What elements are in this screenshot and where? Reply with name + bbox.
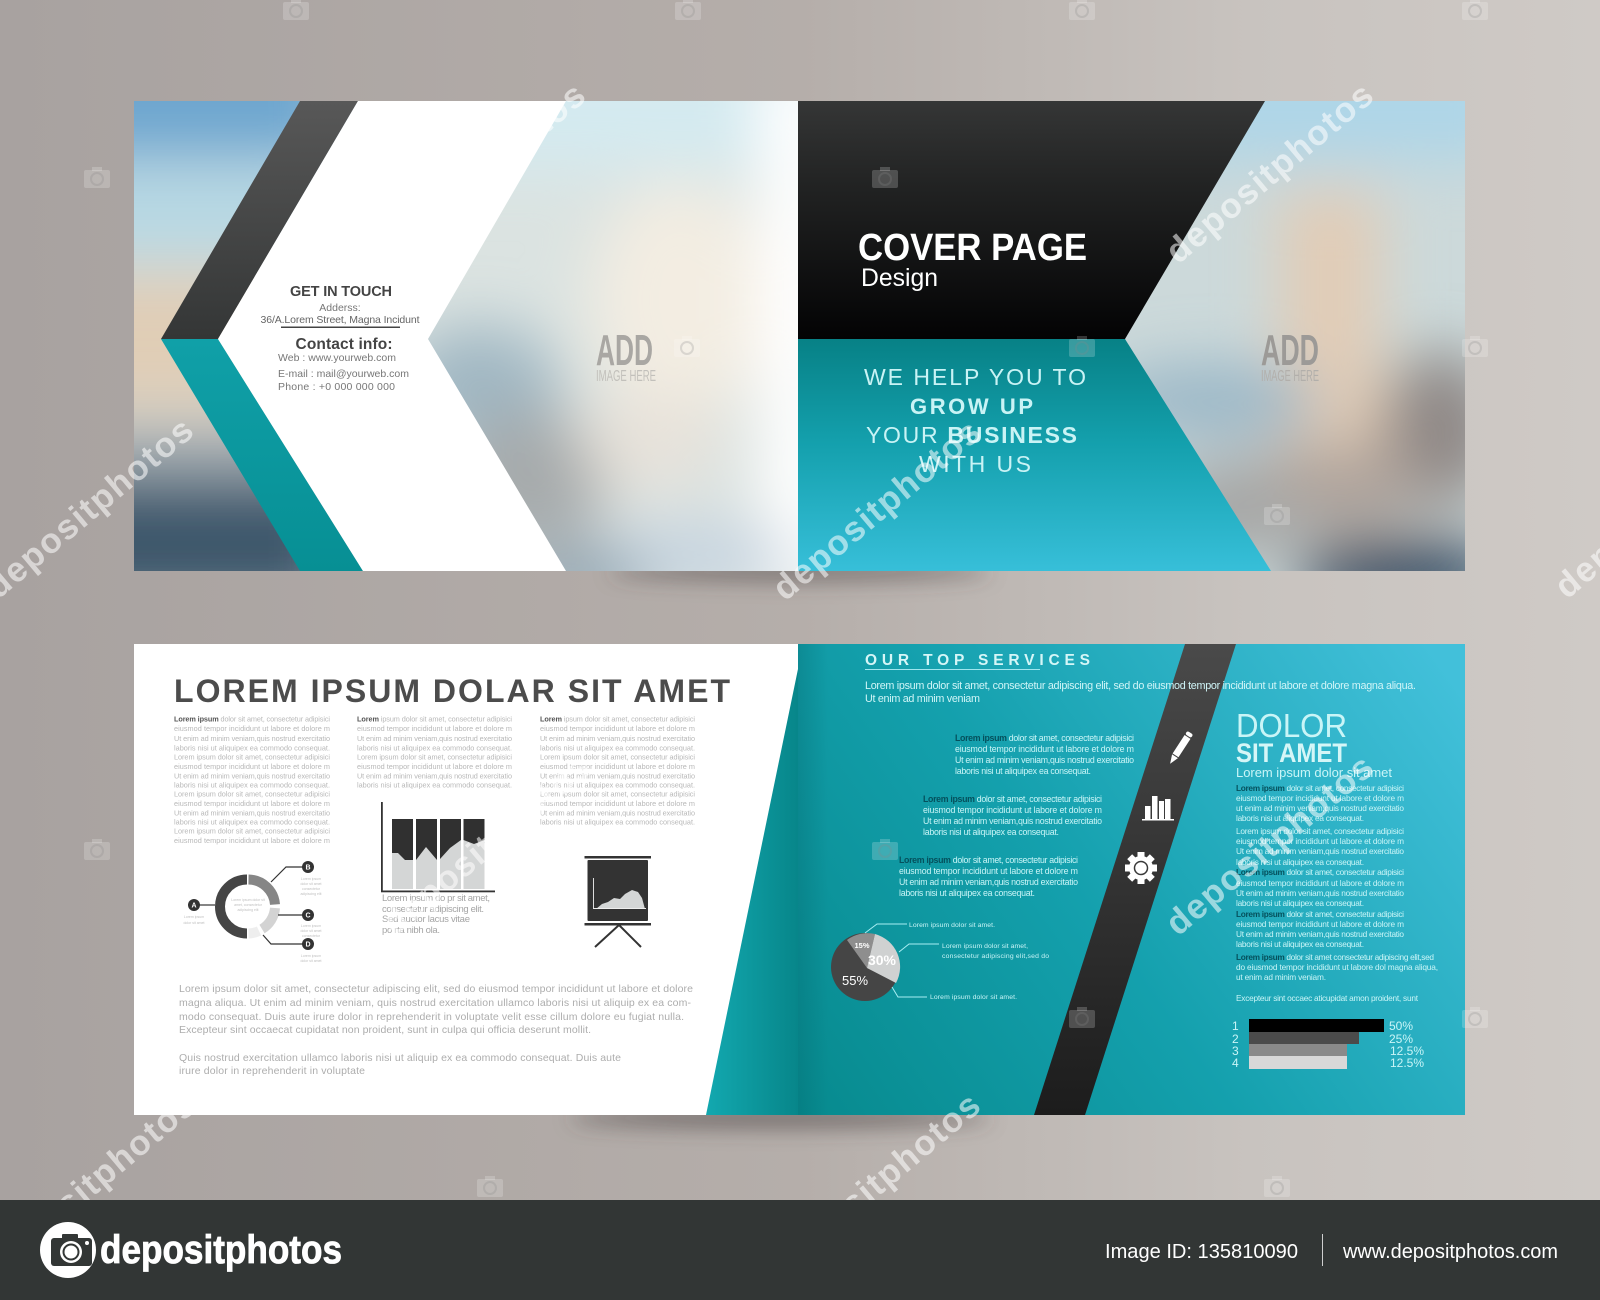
service text 2: Lorem ipsum dolor sit amet, consectetur adipisici [923,794,1102,804]
placeholder: add image [596,326,656,385]
body paragraph: magna aliqua. Ut enim ad minim veniam, quis nostrud exercitation ullamco laboris nisi ut aliquip ex ea com- [179,997,692,1009]
horizontal bar chart: 12.5% [1390,1044,1424,1058]
text column 1: Lorem ipsum dolor sit amet, consectetur adipisici [174,714,330,724]
diagonal dark strip [1034,644,1236,1115]
watermark: diagonal text and camera marks: depositphotos [370,75,593,271]
chart caption: po rta nibh ola. [382,925,440,936]
horizontal bar chart: 3 [1232,1044,1239,1058]
icon: gear [1125,852,1157,884]
text column 3: eiusmod tempor incididunt ut labore et dolore m [540,724,695,733]
text column 3: Ut enim ad minim veniam,quis nostrud exercitatio [540,734,695,743]
right column text: eiusmod tempor incididunt ut labore et dolore m [1236,793,1404,803]
right column text: do eiusmod tempor incididunt ut labore dol magna aliqua, [1236,962,1438,972]
text column 1: laboris nisi ut aliquipex ea commodo consequat. [174,780,330,790]
contact block: Web : www.yourweb.com [278,352,396,364]
watermark: diagonal text and camera marks: depositphotos [1158,747,1381,943]
teal cover block [798,339,1271,571]
placeholder: add image: ADD [596,326,653,375]
text column 1: laboris nisi ut aliquipex ea commodo consequat. [174,818,330,826]
contact block: 36/A.Lorem Street, Magna Incidunt [260,314,420,326]
service text 2: laboris nisi ut aliquipex ea consequat. [923,827,1059,837]
donut chart: Lorem ipsum [184,915,204,919]
right column text: eiusmod tempor incididunt ut labore et dolore m [1236,919,1404,929]
icon: pencil [1167,731,1193,766]
chart caption: consectetur adipiscing elit. [382,904,484,915]
pie chart: Lorem ipsum dolor sit amet, [942,943,1028,950]
donut chart: Lorem ipsum dolor sit [231,898,265,902]
right column text: Excepteur sint occaec aticupidat amon proident, sunt [1236,993,1419,1003]
horizontal bar chart: 2 [1232,1032,1239,1046]
horizontal bar chart [1232,1019,1424,1070]
chart caption: Sed auctor lacus vitae [382,914,470,925]
text column 3: Ut enim ad minim veniam,quis nostrud exercitatio [540,808,695,818]
page shadows [570,563,990,1128]
text column 1: Lorem ipsum dolor sit amet, consectetur adipisici [174,752,330,762]
service text 1 [955,733,1134,776]
text column 3 [540,714,695,826]
watermark: diagonal text and camera marks: depositphotos [765,412,988,608]
service text 2 [923,794,1102,837]
donut chart: amet, consectetur [234,903,263,907]
right column text: Ut enim ad minim veniam,quis nostrud exercitatio [1236,888,1404,898]
donut chart: A [191,902,197,910]
text column 3: eiusmod tempor incididunt ut labore et dolore m [540,799,695,808]
cover slogan [864,364,1086,477]
horizontal bar chart: 12.5% [1390,1056,1424,1070]
placeholder: add image: ADD [1261,326,1319,375]
body paragraph: Excepteur sint occaecat cupidatat non proident, sunt in culpa qui officia deserunt mollit. [179,1024,591,1036]
text column 2: Ut enim ad minim veniam,quis nostrud exercitatio [357,772,512,780]
text column 1: Ut enim ad minim veniam,quis nostrud exercitatio [174,734,330,743]
cover title: COVER PAGE [858,227,1087,269]
right column text: Lorem ipsum dolor sit amet, consectetur adipisici [1236,826,1404,836]
service text 2: Ut enim ad minim veniam,quis nostrud exercitatio [923,816,1102,826]
right column text: ut enim ad minim veniam. [1236,972,1326,982]
right column text: Lorem ipsum dolor sit amet consectetur adipiscing elit,sed [1236,952,1434,962]
text column 1: Ut enim ad minim veniam,quis nostrud exercitatio [174,772,330,780]
service text 3: laboris nisi ut aliquipex ea consequat. [899,888,1035,898]
service text 1: eiusmod tempor incididunt ut labore et dolore m [955,744,1134,754]
logo wordmark: depositphotos [100,1228,342,1272]
text column 1: eiusmod tempor incididunt ut labore et dolore m [174,799,330,808]
pie chart: consectetur adipiscing elit,sed do [942,953,1049,960]
contact block: Contact info: [296,336,392,353]
contact block: GET IN TOUCH [290,284,392,300]
text column 3: laboris nisi ut aliquipex ea commodo consequat. [540,818,695,826]
donut chart: adipiscing elit [300,892,322,896]
pie chart: Lorem ipsum dolor sit amet. [930,994,1017,1001]
donut chart: Lorem ipsum [301,954,321,958]
donut chart [183,861,322,963]
dolor heading: DOLOR [1236,707,1347,744]
right column text: ut enim ad minim veniam,quis nostrud exercitatio [1236,803,1404,813]
body paragraph: modo consequat. Duis aute irure dolor in reprehenderit in voluptate velit esse cillum dolore eu fugiat nulla. [179,1011,684,1023]
watermark: diagonal text and camera marks: depositphotos [375,747,598,943]
right column text: Ut enim ad minim veniam,quis nostrud exercitatio [1236,929,1404,939]
horizontal bar chart: 50% [1389,1019,1413,1033]
icon: camera logo [40,1222,96,1278]
donut chart: Lorem ipsum [301,877,321,881]
body paragraph [179,983,693,1077]
placeholder: add image: IMAGE HERE [596,368,656,385]
service text 3: eiusmod tempor incididunt ut labore et dolore m [899,866,1078,876]
contact block [260,284,420,393]
body paragraph: Quis nostrud exercitation ullamco laboris nisi ut aliquip ex ea commodo consequat. Duis aute [179,1052,621,1064]
text column 3: Ut enim ad minim veniam,quis nostrud exercitatio [540,772,695,780]
service text 1: Ut enim ad minim veniam,quis nostrud exercitatio [955,755,1134,765]
donut chart: consectetur [302,934,321,938]
service text 1: laboris nisi ut aliquipex ea consequat. [955,766,1091,776]
donut chart: dolor sit amet [300,929,322,933]
text column 3: laboris nisi ut aliquipex ea commodo consequat. [540,780,695,790]
text column 1: eiusmod tempor incididunt ut labore et dolore m [174,762,330,771]
pie chart: 55% [842,973,868,988]
cover slogan: GROW UP [910,394,1033,419]
service text 3 [899,855,1078,898]
services intro [865,680,1416,705]
image id: Image ID: 135810090 [1105,1241,1298,1263]
contact block: Adderss: [319,302,361,314]
cover slogan: YOUR BUSINESS [866,422,1077,448]
text column 1: laboris nisi ut aliquipex ea commodo consequat. [174,744,330,752]
text column 2: laboris nisi ut aliquipex ea commodo consequat. [357,744,512,752]
services intro: Lorem ipsum dolor sit amet, consectetur adipiscing elit, sed do eiusmod tempor incididunt ut labore et dolore magna aliqua. [865,680,1416,692]
dolor heading: SIT AMET [1236,738,1347,768]
donut chart: C [305,912,311,920]
right column text: Lorem ipsum dolor sit amet, consectetur adipisici [1236,783,1404,793]
placeholder: add image: IMAGE HERE [1261,368,1319,385]
chart caption: Lorem ipsum do pr sit amet, [382,893,490,904]
text column 3: Lorem ipsum dolor sit amet, consectetur adipisici [540,752,695,762]
service text 3: Lorem ipsum dolor sit amet, consectetur adipisici [899,855,1078,865]
panel: inside left page [134,644,798,1115]
placeholder: add image [1261,326,1319,385]
blurred photo: front cover [1125,101,1465,571]
teal corner shape [706,669,798,1115]
text column 3: eiusmod tempor incididunt ut labore et dolore m [540,762,695,771]
cover slogan: WITH US [919,451,1031,477]
contact block: Phone : +0 000 000 000 [278,381,395,393]
contact block: E-mail : mail@yourweb.com [278,368,409,380]
dark cover block [798,101,1265,339]
donut chart: B [305,864,311,872]
website: www.depositphotos.com [1342,1241,1558,1263]
pie chart: 30% [868,952,897,968]
pie chart [831,922,1049,1001]
blurred photo: back cover [134,101,798,571]
donut chart: Lorem ipsum [301,924,321,928]
pie chart: 15% [854,941,870,950]
heading: LOREM IPSUM DOLAR SIT AMET [174,673,730,709]
text column 3: laboris nisi ut aliquipex ea commodo consequat. [540,744,695,752]
donut chart: consectetur [302,887,321,891]
services intro: Ut enim ad minim veniam [865,693,980,705]
cover title [858,227,1087,292]
right column text: Lorem ipsum dolor sit amet, consectetur adipisici [1236,909,1404,919]
text column 2: laboris nisi ut aliquipex ea commodo consequat. [357,780,512,790]
text column 1: Lorem ipsum dolor sit amet, consectetur adipisici [174,826,330,836]
right column text [1236,783,1438,1003]
text column 2: eiusmod tempor incididunt ut labore et dolore m [357,724,512,733]
body paragraph: irure dolor in reprehenderit in voluptate [179,1065,365,1077]
panel: front cover [798,101,1465,571]
right column text: Lorem ipsum dolor sit amet, consectetur adipisici [1236,867,1404,877]
donut chart: dolor sit amet [300,882,322,886]
donut chart: dolor sit amet [183,921,205,925]
service text 1: Lorem ipsum dolor sit amet, consectetur adipisici [955,733,1134,743]
cover title: Design [861,264,938,292]
body paragraph: Lorem ipsum dolor sit amet, consectetur adipiscing elit, sed do eiusmod tempor incididunt ut labore et dolore [179,983,693,995]
icon: projector screen [584,856,651,947]
dark chevron band [161,101,358,339]
icon: bar chart [1142,796,1174,820]
right column text: laboris nisi ut aliquipex ea consequat. [1236,813,1364,823]
text column 2: Ut enim ad minim veniam,quis nostrud exercitatio [357,734,512,743]
white chevron [218,101,566,571]
service text 3: Ut enim ad minim veniam,quis nostrud exercitatio [899,877,1078,887]
panel: inside right page [798,644,1465,1115]
text column 3: Lorem ipsum dolor sit amet, consectetur adipisici [540,790,695,798]
dolor heading [1236,707,1392,780]
horizontal bar chart: 1 [1232,1019,1239,1033]
pie chart: Lorem ipsum dolor sit amet. [909,922,995,929]
text column 2: Lorem ipsum dolor sit amet, consectetur adipisici [357,752,512,762]
text column 2 [357,714,512,790]
text column 3: Lorem ipsum dolor sit amet, consectetur adipisici [540,714,695,724]
chart caption [382,893,490,936]
donut chart: D [305,942,311,948]
service text 2: eiusmod tempor incididunt ut labore et dolore m [923,805,1102,815]
text column 1: Ut enim ad minim veniam,quis nostrud exercitatio [174,808,330,818]
dolor heading: Lorem ipsum dolor sit amet [1236,765,1392,780]
footer bar [0,1200,1600,1300]
right column text: laboris nisi ut aliquipex ea consequat. [1236,857,1364,867]
text column 1: Lorem ipsum dolor sit amet, consectetur adipisici [174,790,330,798]
panel: back cover [134,101,798,571]
horizontal bar chart: 4 [1232,1056,1239,1070]
right column text: laboris nisi ut aliquipex ea consequat. [1236,939,1364,949]
cover slogan: WE HELP YOU TO [864,364,1086,390]
right column text: eiusmod tempor incididunt ut labore et dolore m [1236,878,1404,888]
services heading: OUR TOP SERVICES [865,652,1090,669]
area bar chart [381,802,495,892]
horizontal bar chart: 25% [1389,1032,1413,1046]
donut chart: adipiscing elit [237,908,259,912]
watermark: diagonal text and camera marks: depositphotos [1158,75,1381,271]
right column text: laboris nisi ut aliquipex ea consequat. [1236,898,1364,908]
text column 2: Lorem ipsum dolor sit amet, consectetur adipisici [357,714,512,724]
text column 1: eiusmod tempor incididunt ut labore et dolore m [174,836,330,845]
right column text: eiusmod tempor incididunt ut labore et dolore m [1236,836,1404,846]
teal chevron band [161,339,363,571]
text column 1 [174,714,330,845]
text column 2: eiusmod tempor incididunt ut labore et dolore m [357,762,512,771]
donut chart: dolor sit amet [300,959,322,963]
watermark: diagonal text and camera marks: depositphotos [765,1085,988,1281]
right column text: Ut enim ad minim veniam,quis nostrud exercitatio [1236,846,1404,856]
text column 1: eiusmod tempor incididunt ut labore et dolore m [174,724,330,733]
